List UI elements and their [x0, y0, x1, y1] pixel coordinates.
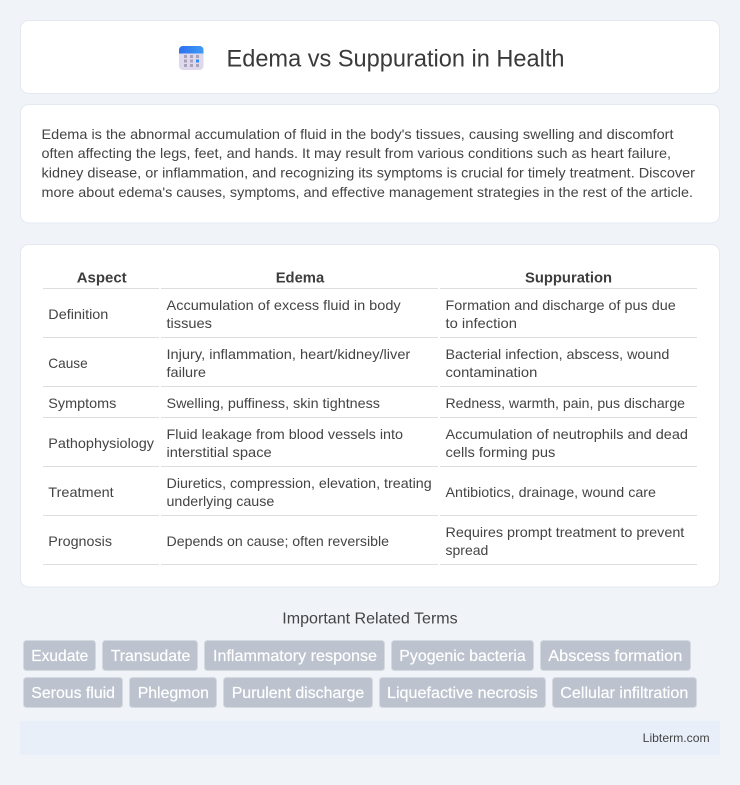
- row: Prognosis: Prognosis: [48, 533, 112, 549]
- table header row: [43, 270, 697, 289]
- description text: kidney disease, or inflammation, and recognizing its symptoms is crucial for timely treatment. Discover: [42, 164, 695, 180]
- row: Definition: Formation and discharge of pus due: [446, 297, 676, 313]
- panel: description: [20, 104, 720, 223]
- tag: Liquefactive necrosis: Liquefactive necrosis: [387, 685, 538, 702]
- row: Pathophysiology: Accumulation of neutrophils and dead: [446, 426, 688, 442]
- tag cloud: related terms: [24, 640, 696, 708]
- row: Cause: Injury, inflammation, heart/kidney/liver: [166, 346, 411, 362]
- tag: Phlegmon: Phlegmon: [138, 685, 209, 702]
- row: Definition: [43, 297, 697, 338]
- row: Symptoms: [43, 395, 697, 418]
- tag: Abscess formation: [540, 640, 690, 670]
- row: Definition: Accumulation of excess fluid in body: [166, 297, 401, 313]
- tag: Phlegmon: [130, 678, 216, 708]
- table header row: Suppuration: [525, 270, 612, 287]
- row: Treatment: Diuretics, compression, elevation, treating: [166, 475, 432, 491]
- row: Pathophysiology: [43, 426, 697, 467]
- row: Treatment: underlying cause: [166, 493, 275, 509]
- table header row: Edema: [276, 270, 325, 287]
- tag: Cellular infiltration: [552, 678, 696, 708]
- row: Definition: to infection: [446, 315, 517, 331]
- footer credit: Libterm.com: [643, 731, 710, 745]
- tag: Serous fluid: [24, 678, 122, 708]
- row: Prognosis: [43, 524, 697, 565]
- tag: Pyogenic bacteria: Pyogenic bacteria: [399, 648, 526, 665]
- row: Prognosis: Requires prompt treatment to prevent: [446, 524, 684, 540]
- tag: Purulent discharge: [224, 678, 372, 708]
- row: Cause: Bacterial infection, abscess, wound: [446, 346, 669, 362]
- table header row: Aspect: [77, 270, 127, 287]
- row: Symptoms: Redness, warmth, pain, pus discharge: [446, 395, 685, 411]
- description text: often affecting the legs, feet, and hands. It may result from various conditions such as heart failure,: [42, 145, 671, 161]
- tag: Liquefactive necrosis: [380, 678, 546, 708]
- row: Pathophysiology: interstitial space: [166, 444, 272, 460]
- tag: Transudate: [102, 640, 198, 670]
- tag: Exudate: [24, 640, 96, 670]
- row: Prognosis: spread: [446, 542, 488, 558]
- row: Cause: failure: [166, 364, 206, 380]
- row: Pathophysiology: cells forming pus: [446, 444, 555, 460]
- row: Treatment: [43, 475, 697, 516]
- row: Cause: Cause: [48, 355, 88, 371]
- title: Edema vs Suppuration in Health: [226, 46, 564, 72]
- row: Symptoms: Symptoms: [48, 395, 116, 411]
- tag: Purulent discharge: Purulent discharge: [232, 685, 364, 702]
- row: Cause: [43, 346, 697, 387]
- row: Cause: contamination: [446, 364, 537, 380]
- row: Definition: Definition: [48, 306, 108, 322]
- description text: Edema is the abnormal accumulation of fluid in the body's tissues, causing swelling and discomfort: [42, 126, 674, 142]
- tag: Exudate: Exudate: [31, 648, 88, 665]
- tag: Abscess formation: Abscess formation: [548, 648, 682, 665]
- row: Pathophysiology: Pathophysiology: [48, 435, 154, 451]
- heading: related terms: Important Related Terms: [282, 610, 458, 627]
- row: Symptoms: Swelling, puffiness, skin tightness: [166, 395, 380, 411]
- description text: more about edema's causes, symptoms, and effective management strategies in the rest of the article.: [42, 184, 693, 200]
- tag: Inflammatory response: [204, 640, 384, 670]
- icon: calendar: [179, 46, 204, 70]
- tag: Cellular infiltration: Cellular infiltration: [560, 685, 688, 702]
- tag: Transudate: Transudate: [111, 648, 190, 665]
- row: Prognosis: Depends on cause; often reversible: [166, 533, 389, 549]
- row: Treatment: Antibiotics, drainage, wound care: [446, 484, 656, 500]
- tag: Serous fluid: Serous fluid: [31, 685, 115, 702]
- tag: Inflammatory response: Inflammatory response: [213, 648, 377, 665]
- row: Pathophysiology: Fluid leakage from blood vessels into: [166, 426, 403, 442]
- panel: comparison table: [20, 244, 720, 587]
- row: Definition: tissues: [166, 315, 212, 331]
- panel: header: [20, 20, 720, 94]
- description text: [42, 126, 695, 200]
- tag: Pyogenic bacteria: [392, 640, 534, 670]
- footer: [20, 721, 720, 755]
- row: Treatment: Treatment: [48, 484, 114, 500]
